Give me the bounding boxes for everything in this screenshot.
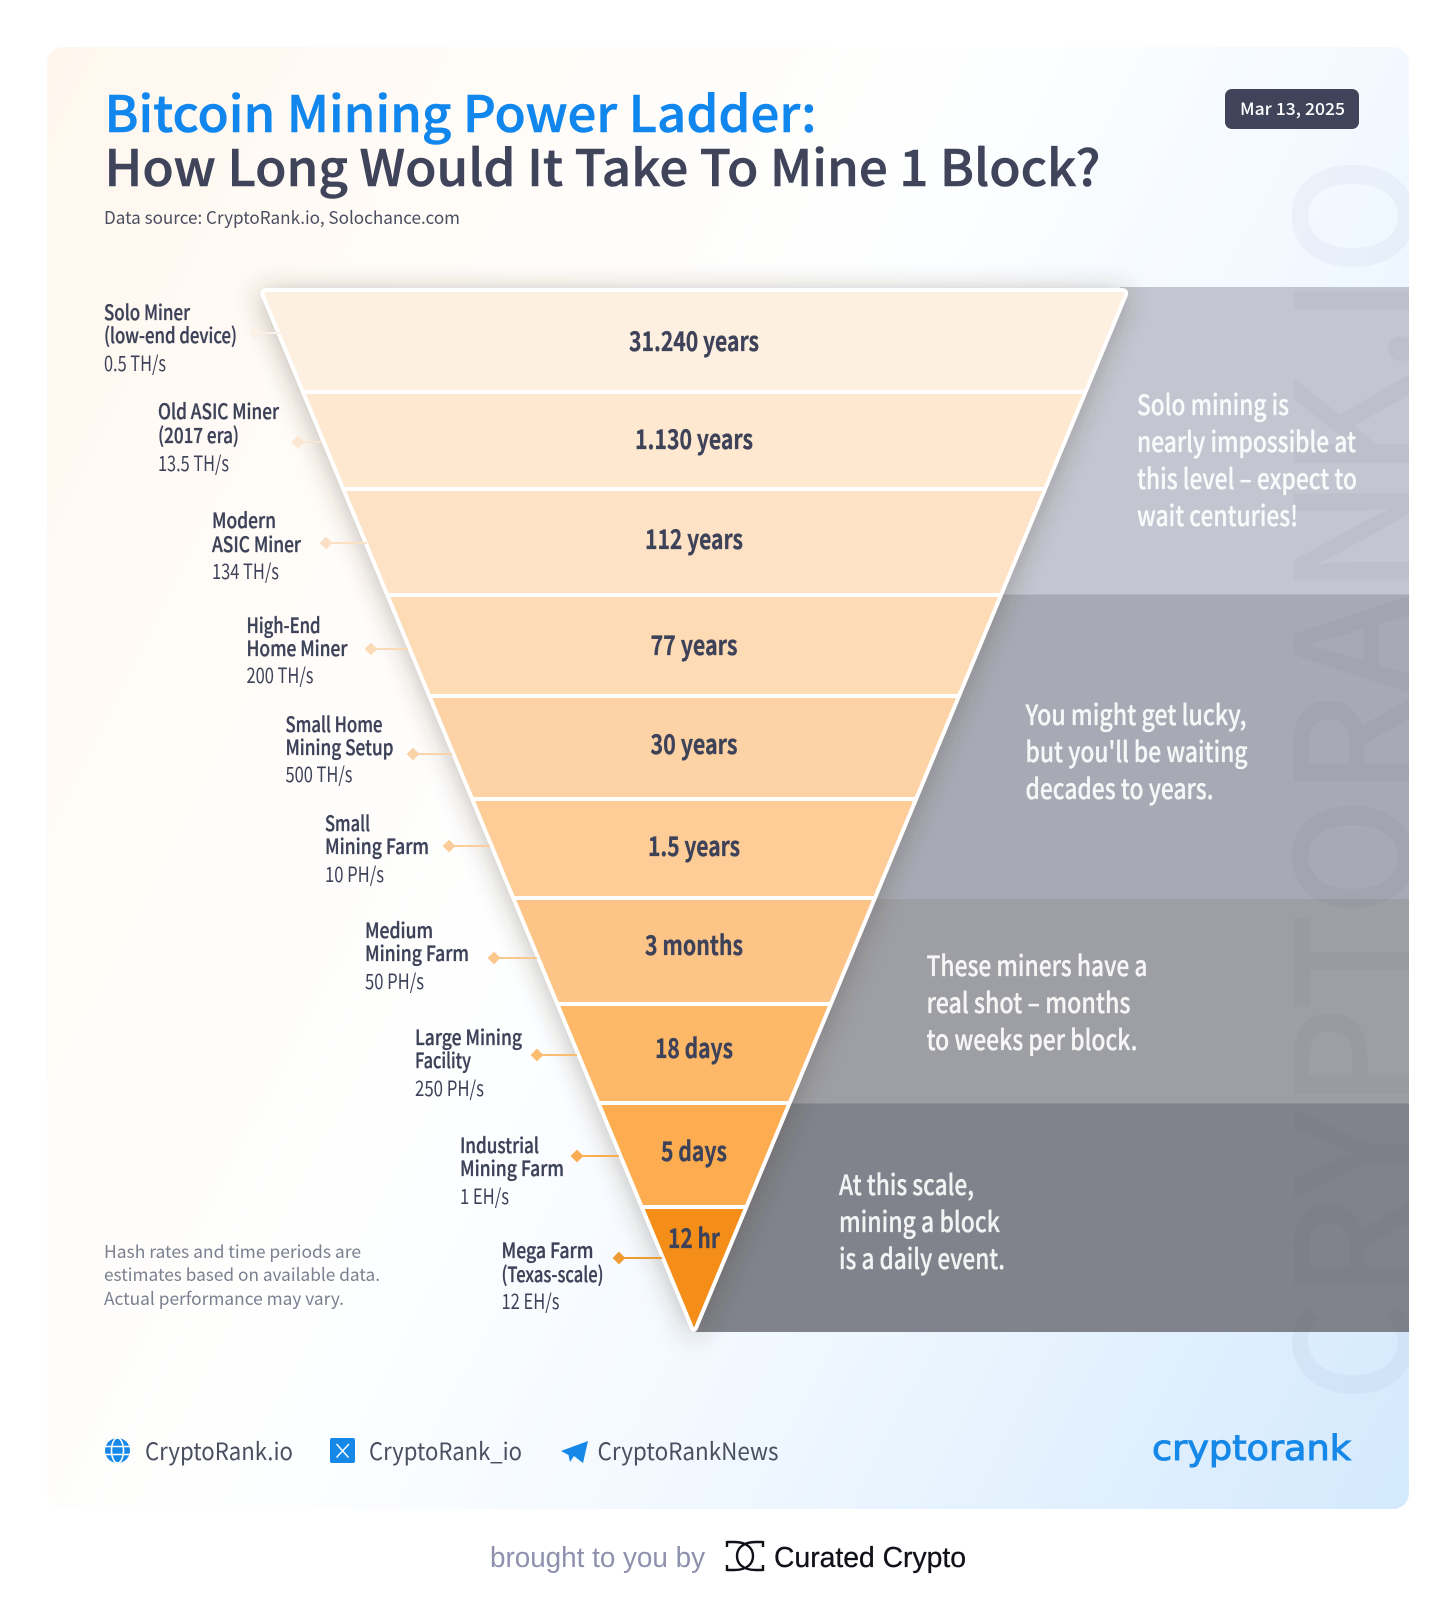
label: small mining farm: Small: [325, 808, 370, 838]
icon: telegram: [561, 1441, 588, 1463]
funnel shadow: [258, 292, 1128, 1340]
cryptorank logo: cryptorank: [1152, 1429, 1352, 1469]
insight text 2: decades to years.: [1026, 768, 1214, 808]
telegram handle: CryptoRankNews: [598, 1432, 778, 1467]
time values: 1.5 years: [648, 825, 740, 864]
label: medium mining farm: 50 PH/s: [365, 966, 424, 996]
insight text 2: You might get lucky,: [1025, 694, 1246, 734]
time values: 30 years: [650, 723, 738, 762]
insight text 4: At this scale,: [839, 1164, 974, 1204]
label: old asic miner: 13.5 TH/s: [158, 448, 229, 478]
date badge: [1225, 89, 1359, 129]
label: solo miner: [104, 297, 237, 378]
time values: 5 days: [661, 1130, 727, 1169]
time values: 77 years: [650, 624, 738, 663]
label: industrial mining farm: [460, 1130, 564, 1211]
label: large mining facility: Facility: [415, 1045, 471, 1075]
watermark: CRYPTORANK.IO: [1227, 156, 1456, 1403]
label: modern asic miner: [212, 505, 301, 586]
time values: 12 hr: [668, 1217, 720, 1256]
title: [104, 75, 1100, 201]
insight text 3: to weeks per block.: [926, 1019, 1138, 1059]
title: Bitcoin Mining Power Ladder:: [104, 75, 816, 147]
label: small home mining setup: [286, 709, 394, 789]
label: large mining facility: 250 PH/s: [415, 1073, 484, 1103]
label: industrial mining farm: Mining Farm: [460, 1153, 564, 1183]
disclaimer: Hash rates and time periods are: [104, 1239, 361, 1264]
label: modern asic miner: Modern: [212, 505, 276, 535]
date badge: Mar 13, 2025: [1240, 95, 1345, 120]
label: solo miner: Solo Miner: [104, 297, 190, 327]
label: mega farm: Mega Farm: [502, 1235, 594, 1265]
label: solo miner: (low-end device): [104, 320, 237, 350]
label: small mining farm: Mining Farm: [325, 831, 429, 861]
disclaimer: estimates based on available data.: [104, 1262, 380, 1287]
insight text 2: but you'll be waiting: [1026, 731, 1248, 771]
label: medium mining farm: Medium: [365, 915, 433, 945]
label: small mining farm: 10 PH/s: [325, 859, 384, 889]
label: high-end home miner: Home Miner: [246, 633, 348, 663]
label: modern asic miner: 134 TH/s: [212, 556, 279, 586]
website link: CryptoRank.io: [145, 1432, 293, 1467]
time values: 112 years: [645, 518, 743, 557]
label: industrial mining farm: Industrial: [460, 1130, 539, 1160]
insight text 3: These miners have a: [926, 945, 1148, 985]
label: solo miner: 0.5 TH/s: [104, 348, 166, 378]
time values: 31.240 years: [629, 320, 759, 359]
label: modern asic miner: ASIC Miner: [212, 529, 301, 559]
insight text 4: is a daily event.: [839, 1238, 1005, 1278]
insight text 2: [1025, 694, 1248, 808]
time values: 3 months: [645, 924, 743, 963]
label: old asic miner: (2017 era): [158, 420, 239, 450]
label: small home mining setup: Small Home: [286, 709, 382, 739]
label: large mining facility: [415, 1022, 522, 1103]
grey insight panels: [694, 287, 1410, 1332]
insight text 1: nearly impossible at: [1137, 421, 1356, 461]
x handle: CryptoRank_io: [369, 1432, 522, 1467]
insight text 3: [926, 945, 1148, 1059]
label: high-end home miner: High-End: [246, 610, 320, 640]
disclaimer: Actual performance may vary.: [104, 1286, 344, 1311]
label: large mining facility: Large Mining: [415, 1022, 522, 1052]
label: high-end home miner: [246, 610, 348, 690]
label: small mining farm: [325, 808, 429, 889]
insight text 1: this level – expect to: [1137, 458, 1357, 498]
label: small home mining setup: 500 TH/s: [286, 759, 353, 789]
insight text 1: wait centuries!: [1137, 495, 1298, 535]
time values: 1.130 years: [635, 418, 753, 457]
brought to you by: brought to you by: [490, 1542, 705, 1574]
time values: [629, 320, 759, 1256]
disclaimer: [104, 1239, 380, 1311]
insight text 4: mining a block: [839, 1201, 1000, 1241]
connectors: [250, 328, 662, 1263]
label: mega farm: [502, 1235, 604, 1316]
label: old asic miner: [158, 396, 279, 478]
icon: x: [330, 1438, 355, 1463]
title: How Long Would It Take To Mine 1 Block?: [104, 129, 1100, 201]
label: mega farm: 12 EH/s: [502, 1286, 560, 1316]
label: medium mining farm: [365, 915, 469, 996]
label: high-end home miner: 200 TH/s: [246, 660, 314, 690]
icon: globe: [105, 1438, 130, 1463]
insight text 3: real shot – months: [926, 982, 1130, 1022]
data source: Data source: CryptoRank.io, Solochance.com: [104, 205, 460, 230]
label: small home mining setup: Mining Setup: [286, 732, 394, 762]
insight text 1: [1137, 384, 1357, 535]
funnel: [250, 285, 1150, 1337]
insight text 4: [839, 1164, 1005, 1278]
curated crypto wordmark: Curated Crypto: [774, 1542, 966, 1574]
insight text 1: Solo mining is: [1137, 384, 1289, 424]
time values: 18 days: [655, 1027, 733, 1066]
label: old asic miner: Old ASIC Miner: [158, 396, 279, 426]
label: mega farm: (Texas-scale): [502, 1259, 604, 1289]
label: medium mining farm: Mining Farm: [365, 938, 469, 968]
label: industrial mining farm: 1 EH/s: [460, 1181, 509, 1211]
icon: curated crypto: [727, 1541, 763, 1571]
